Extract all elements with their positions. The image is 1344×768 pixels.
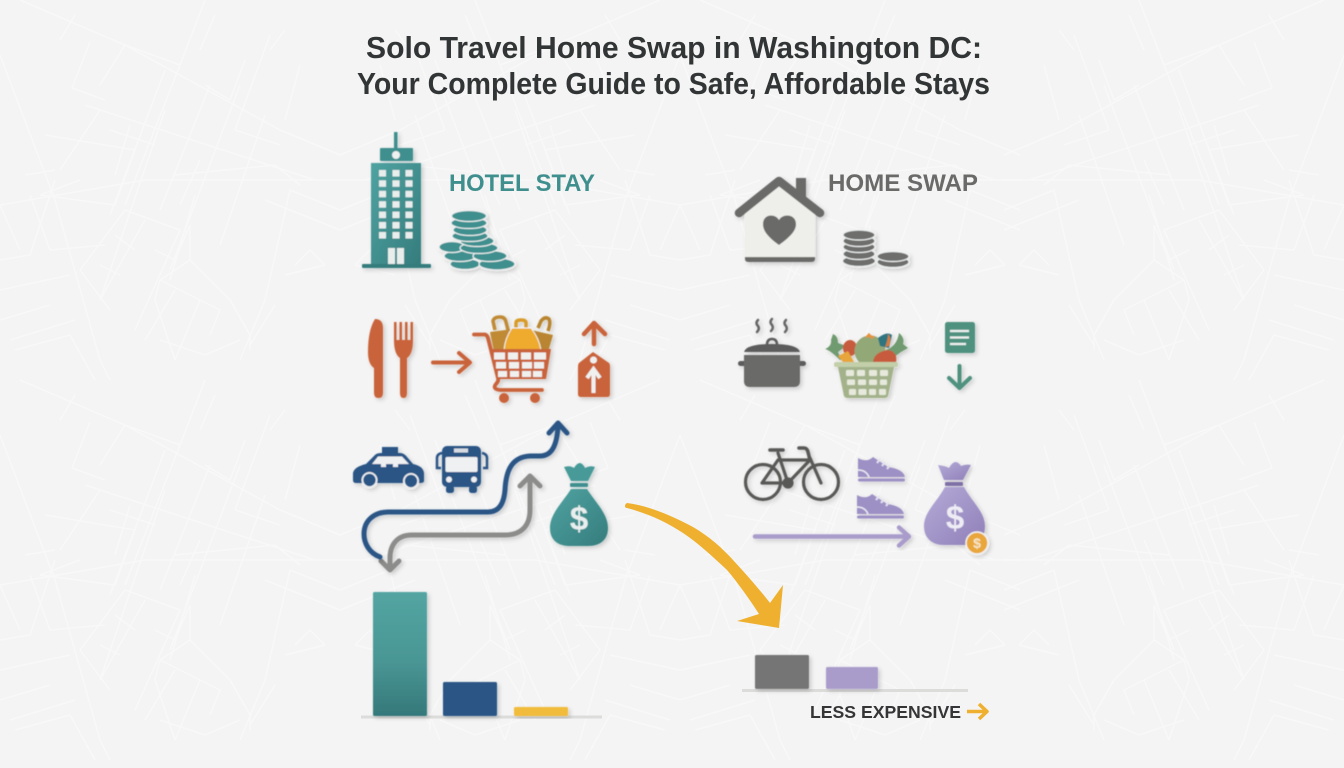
icon: teal money bag: $ <box>570 500 588 537</box>
bar: home swap purple <box>826 667 878 689</box>
icon: knife and fork <box>368 319 413 398</box>
label: hotel stay: HOTEL STAY <box>449 170 595 197</box>
icon: hotel building <box>362 132 431 268</box>
panel: hotel stay <box>362 132 595 270</box>
arrow: food to shopping <box>433 353 470 372</box>
title: Your Complete Guide to Safe, Affordable Stays <box>357 67 990 101</box>
icon: walking shoes <box>857 457 905 518</box>
icon: vegetable basket <box>825 333 908 398</box>
arrow: purple route <box>755 528 909 546</box>
icon: cooking pot <box>738 319 806 387</box>
panel: hotel food and shopping <box>368 317 610 403</box>
bar: home swap gray <box>755 655 809 689</box>
icon: shopping cart with bags <box>474 317 553 403</box>
arrow: blue route <box>364 423 567 557</box>
bar: extras <box>514 707 568 716</box>
panel: home transport and cost <box>746 448 988 554</box>
icon: small coin stacks <box>842 230 909 268</box>
label: home swap: HOME SWAP <box>828 170 978 197</box>
icon: purple money bag with coin <box>924 462 988 554</box>
label: less expensive: LESS EXPENSIVE <box>810 702 961 722</box>
icon: house with heart <box>739 178 820 262</box>
title <box>357 31 990 101</box>
bar chart: home swap costs <box>742 655 968 692</box>
icon: purple money bag with coin: $ <box>946 499 964 536</box>
bar: hotel <box>373 592 427 716</box>
icon: tall coin pile <box>439 210 515 270</box>
panel: home cooking and groceries <box>738 319 975 398</box>
icon: bicycle <box>746 448 838 500</box>
icon: document with down arrow <box>945 322 975 388</box>
bar: transport <box>443 682 497 716</box>
arrow: large yellow savings arrow <box>625 503 783 628</box>
icon: teal money bag <box>550 463 608 546</box>
arrow: less expensive <box>967 704 987 719</box>
panel: hotel transport and cost <box>353 423 608 570</box>
panel: home swap <box>739 170 978 268</box>
icon: price tag rising <box>578 323 610 397</box>
icon: bus <box>437 446 487 493</box>
title: Solo Travel Home Swap in Washington DC: <box>366 31 982 65</box>
arrow: gray route <box>381 476 540 570</box>
icon: taxi <box>353 447 424 489</box>
icon: purple money bag with coin: $ <box>973 535 981 551</box>
bar chart: hotel costs <box>361 592 602 718</box>
